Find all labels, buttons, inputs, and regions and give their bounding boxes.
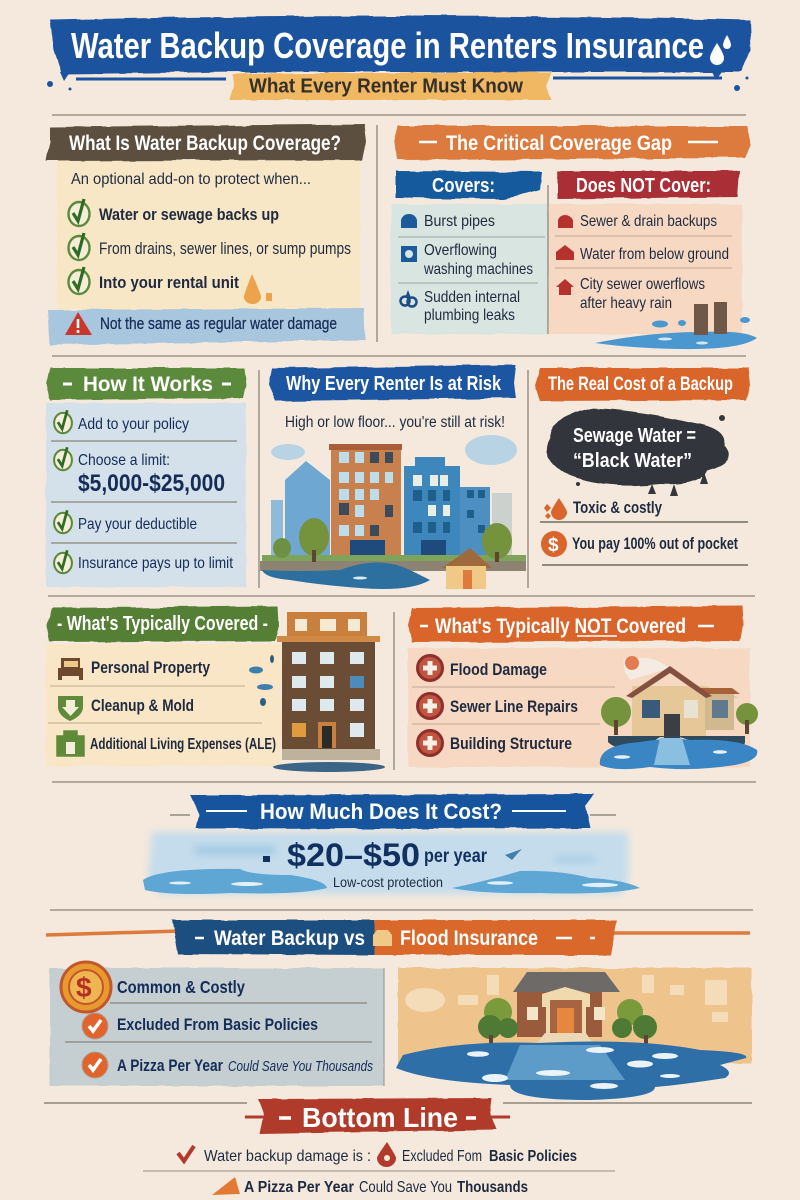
icon: orange drop: [244, 274, 272, 304]
panel: key reasons: [50, 962, 384, 1086]
item: into rental unit: [68, 267, 239, 294]
item: a pizza per year: [82, 1052, 373, 1078]
heading: [535, 368, 750, 401]
heading: [46, 124, 366, 161]
panel: the critical coverage gap: [391, 126, 757, 349]
item: building structure: [418, 730, 572, 756]
step: choose a limit: Choose a limit:: [78, 452, 170, 469]
icon: water drops: [710, 35, 731, 65]
bottom line row 2: Thousands: [457, 1179, 528, 1196]
caption: Low-cost protection: [333, 874, 443, 890]
heading: How Much Does It Cost?: [260, 799, 502, 824]
item: city sewer overflows: [556, 276, 705, 312]
callout: black water splat: [546, 408, 728, 496]
subtitle text: What Every Renter Must Know: [249, 76, 523, 98]
icon: dollar coin: $: [76, 972, 92, 1003]
bottom line row 1: Water backup damage is :: [204, 1148, 371, 1165]
heading: bottom line: [44, 1098, 752, 1134]
item: overflowing washing machines: washing machines: [423, 261, 533, 278]
heading: What Is Water Backup Coverage?: [69, 132, 341, 155]
item: water or sewage: [68, 199, 279, 226]
step: add to policy: Add to your policy: [78, 416, 189, 433]
soft water streaks: [195, 846, 595, 862]
panel: what's typically covered: [46, 606, 385, 772]
heading: The Real Cost of a Backup: [548, 373, 733, 395]
item: from drains: [68, 233, 351, 260]
bottom line row 1: [178, 1142, 577, 1167]
item: overflowing washing machines: [401, 242, 533, 278]
illustration: flooded city: [260, 435, 526, 589]
item: common and costly: Common & Costly: [117, 977, 245, 997]
heading: [408, 606, 743, 642]
step: insurance pays: [54, 550, 233, 573]
icon: water splash: [505, 849, 522, 860]
item: overflowing washing machines: Overflowing: [424, 242, 497, 259]
item: a pizza per year: Could Save You Thousands: [228, 1058, 373, 1075]
callout text: Not the same as regular water damage: [100, 315, 337, 333]
icon: warning triangle: [65, 312, 92, 335]
item: burst pipes: [401, 213, 495, 230]
callout: black water splat: Sewage Water =: [573, 425, 696, 447]
item: water or sewage: Water or sewage backs up: [99, 205, 279, 224]
item: a pizza per year: A Pizza Per Year: [117, 1057, 223, 1075]
item: you pay 100 percent: You pay 100% out of pocket: [572, 534, 738, 553]
bottom line row 1: Excluded Fom: [402, 1148, 482, 1165]
item: you pay 100 percent: $: [548, 535, 559, 556]
heading: water backup vs flood insurance: [46, 920, 750, 955]
item: building structure: Building Structure: [450, 735, 572, 753]
flood water: [396, 1042, 746, 1100]
bottom line row 2: Could Save You: [359, 1179, 452, 1196]
panel: does not cover: [549, 171, 757, 349]
banner underlines and splashes: [47, 72, 748, 91]
item: city sewer overflows: after heavy rain: [580, 295, 672, 312]
step: pay deductible: [54, 510, 197, 533]
does not cover heading: Does NOT Cover:: [576, 175, 711, 197]
item: excluded from basic policies: Excluded From Basic Policies: [117, 1015, 318, 1034]
step: pay deductible: Pay your deductible: [78, 516, 197, 533]
heading: [394, 126, 750, 160]
illustration: flooded house: [600, 656, 758, 769]
heading: [190, 794, 594, 829]
trees: [478, 998, 657, 1046]
bottom line row 2: [212, 1177, 528, 1196]
item: personal property: [58, 658, 211, 680]
puddles: [143, 869, 640, 894]
item: from drains: From drains, sewer lines, or sump pumps: [99, 240, 351, 258]
item: flood damage: Flood Damage: [450, 661, 547, 679]
item: cleanup and mold: [58, 696, 194, 721]
heading: The Critical Coverage Gap: [446, 132, 672, 155]
item: toxic and costly: [544, 498, 662, 520]
big cost figure: per year: [424, 846, 488, 867]
panel: what is water backup coverage: [46, 124, 366, 310]
item: burst pipes: Burst pipes: [424, 213, 495, 230]
item: additional living expenses: Additional Living Expenses (ALE): [90, 736, 276, 753]
panel: what's typically not covered: [408, 606, 758, 769]
heading: bottom line: Bottom Line: [302, 1102, 458, 1133]
heading: water backup vs flood insurance: Water Backup vs: [214, 927, 365, 950]
panel: how it works: [46, 368, 246, 587]
item: water from below ground: Water from below ground: [580, 246, 729, 263]
panel: why every renter is at risk: [260, 365, 526, 589]
heading: - What's Typically Covered -: [57, 613, 268, 635]
panel: the real cost of a backup: [535, 368, 750, 565]
heading: [46, 368, 246, 400]
icon: small box: [373, 930, 392, 946]
heading: What's Typically NOT Covered: [435, 615, 686, 638]
heading: [269, 365, 516, 401]
heading: How It Works: [83, 373, 213, 396]
item: sewer line repairs: [418, 694, 578, 718]
covers heading: [396, 171, 542, 199]
item: sewer line repairs: Sewer Line Repairs: [450, 698, 578, 716]
callout: black water splat: “Black Water”: [573, 450, 692, 472]
callout: not regular water damage: [48, 308, 365, 345]
item: personal property: Personal Property: [91, 659, 211, 677]
bottom line row 2: A Pizza Per Year: [244, 1179, 354, 1196]
item: toxic and costly: Toxic & costly: [573, 498, 662, 517]
item: excluded from basic policies: [82, 1013, 318, 1039]
bottom line row 1: Basic Policies: [489, 1148, 577, 1165]
item: additional living expenses: [57, 731, 276, 756]
step: add to policy: [54, 410, 189, 433]
subtext: High or low floor... you're still at risk!: [285, 414, 505, 431]
covers heading: Covers:: [432, 175, 495, 197]
house: [513, 972, 620, 1042]
panel: how much does it cost: [143, 794, 640, 894]
item: flood damage: [418, 656, 547, 680]
item: city sewer overflows: City sewer owerflows: [580, 276, 705, 293]
intro text: An optional add-on to protect when...: [71, 171, 311, 188]
item: sewer and drain backups: Sewer & drain backups: [580, 213, 717, 230]
heading: water backup vs flood insurance: Flood Insurance: [400, 927, 538, 950]
subtitle ribbon: [229, 72, 552, 100]
heading: Why Every Renter Is at Risk: [286, 373, 502, 395]
item: you pay 100 percent: [541, 531, 738, 557]
step: choose a limit: $5,000-$25,000: [78, 470, 225, 497]
item: water from below ground: [556, 245, 729, 263]
icon: pipes in puddle: [595, 302, 757, 349]
item: sudden internal plumbing leaks: Sudden internal: [424, 289, 520, 306]
big cost figure: $20–$50: [287, 837, 420, 873]
icon: dollar coin: [61, 962, 111, 1012]
item: cleanup and mold: Cleanup & Mold: [91, 697, 194, 715]
big cost figure: [263, 837, 488, 873]
heading: [47, 606, 279, 642]
step: insurance pays: Insurance pays up to limit: [78, 555, 233, 572]
title banner: [50, 16, 751, 74]
illustration: leaking apartment building: [249, 612, 385, 772]
illustration: house in flood water: [396, 968, 752, 1100]
item: into rental unit: Into your rental unit: [99, 273, 239, 292]
step: choose a limit: [54, 447, 225, 497]
item: sudden internal plumbing leaks: plumbing leaks: [424, 307, 515, 324]
panel: covers: [391, 171, 548, 334]
item: sudden internal plumbing leaks: [400, 289, 520, 324]
